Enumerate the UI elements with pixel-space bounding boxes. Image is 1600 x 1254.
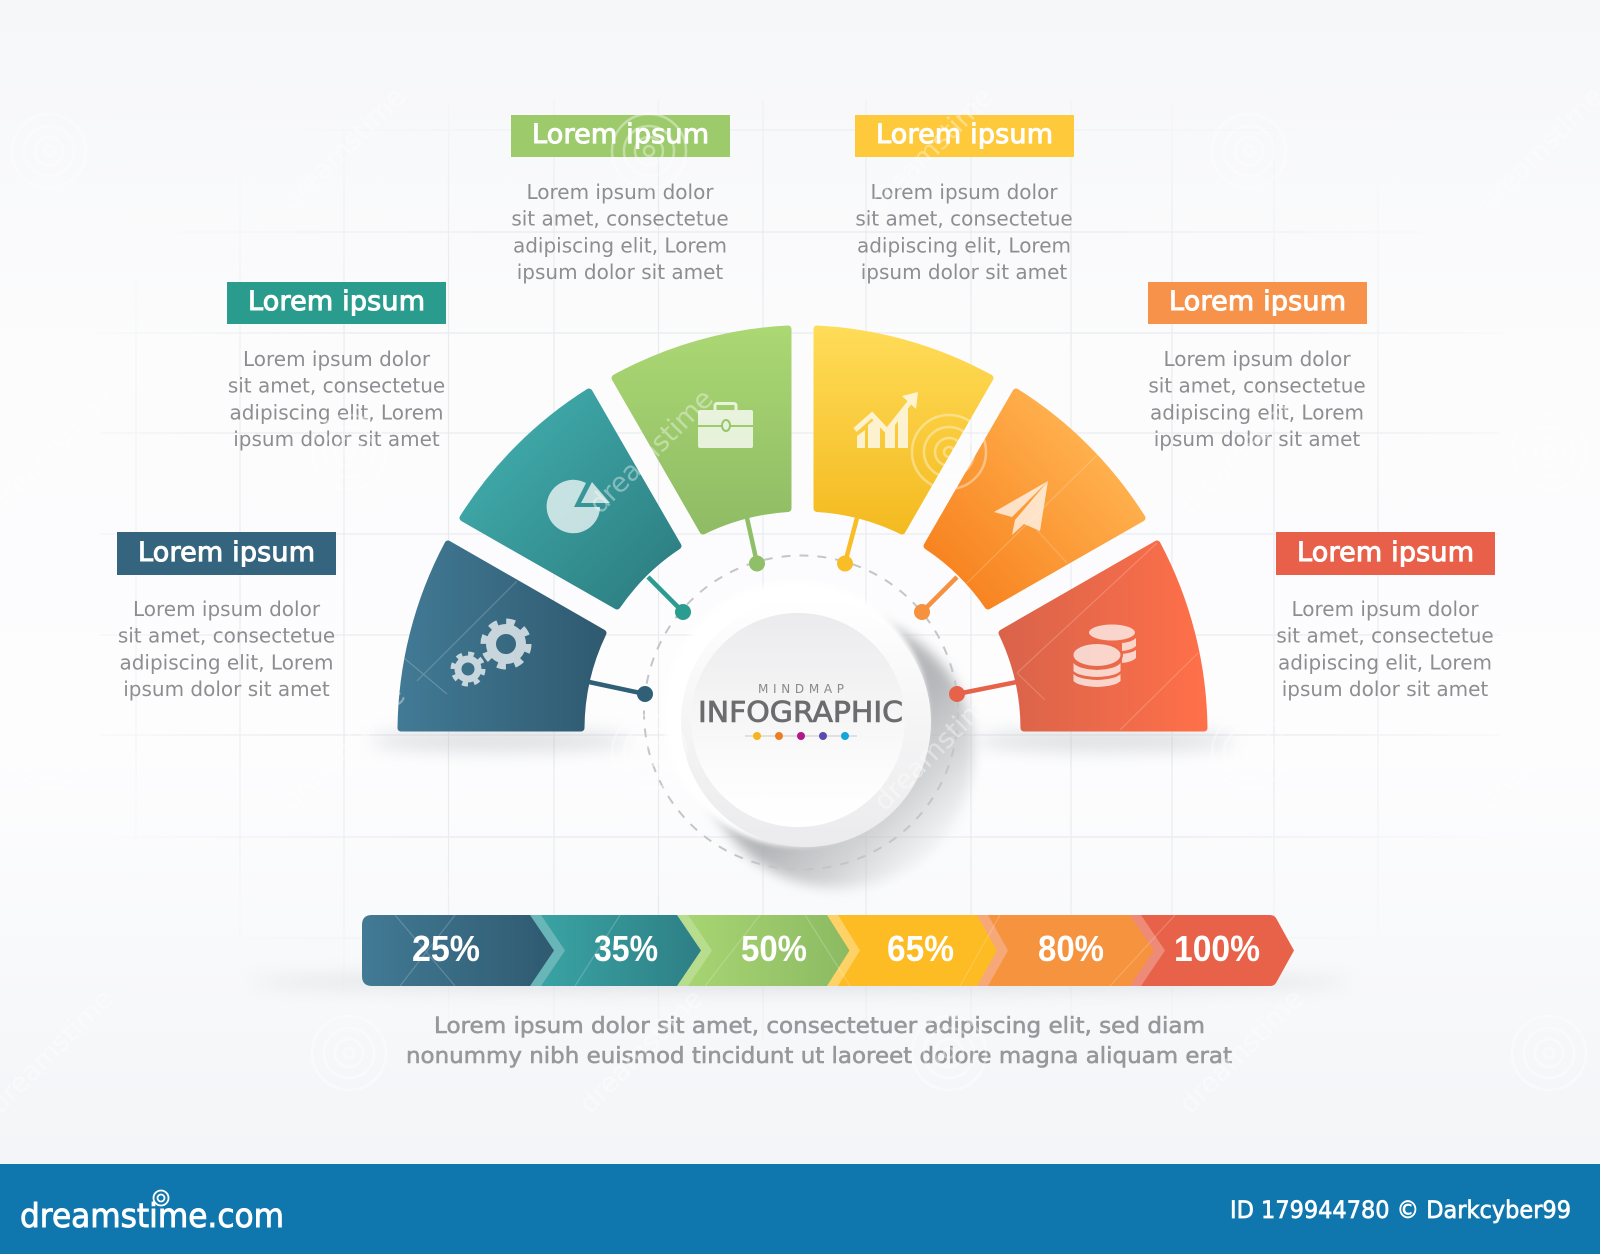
footer credit: ID 179944780 © Darkcyber99 [1230,1196,1571,1224]
label block: 4: Lorem ipsum [876,119,1053,150]
badge caption small: MINDMAP [758,682,844,696]
label block: 1: Lorem ipsum [138,537,315,568]
label block: 5: Lorem ipsum dolor [1163,347,1351,371]
watermark: diagonal site names: dreamstime [868,680,1005,817]
watermark: spiral logos [12,114,1586,1090]
percentages: 100% [1174,928,1260,969]
segment shadows [370,731,1235,751]
label block: 2: Lorem ipsum dolor [243,347,431,371]
label block: 4 [855,115,1074,284]
watermark: diagonal site names: dreamstime [1173,983,1310,1120]
badge dots [745,732,857,740]
label block: 3 [511,115,730,284]
label block: 5 [1148,282,1367,451]
label block: 3: Lorem ipsum dolor [526,180,714,204]
label block: 1: Lorem ipsum dolor [133,597,321,621]
footer bar [0,1164,1600,1254]
icon: pie chart [547,480,610,533]
icon: briefcase [698,404,753,448]
percentages: 65% [887,928,954,969]
dashed orbit ring [644,556,958,870]
label block: 2: sit amet, consectetue [228,374,445,398]
fan segment 1 [401,544,603,728]
label block: 6: adipiscing elit, Lorem [1278,650,1492,674]
icon: gears [453,622,528,684]
watermark: diagonal site names: dreamstime [573,983,710,1120]
watermark: diagonal site names: dreamstime [863,81,1000,218]
label block: 2: adipiscing elit, Lorem [229,400,444,424]
label block: 1 [117,532,336,701]
label block: 2 [227,282,446,451]
fan segment 3 [615,329,788,531]
label block: 5: adipiscing elit, Lorem [1150,400,1364,424]
watermark: diagonal site names: dreamstime [275,81,412,218]
fan segment 4 [817,329,990,531]
center badge [664,582,931,847]
bottom note [406,1013,1232,1069]
icon: paper plane [994,481,1048,535]
icon: growth chart [855,392,918,448]
progress bar [362,915,1294,986]
label block: 1: adipiscing elit, Lorem [119,650,334,674]
label block: 3: ipsum dolor sit amet [517,260,723,284]
percentages: 80% [1038,928,1104,969]
connector lines and dots [589,518,1017,702]
watermark: diagonal site names: dreamstime [583,383,720,520]
label block: 4: ipsum dolor sit amet [861,260,1067,284]
bottom note: nonummy nibh euismod tincidunt ut laoreet dolore magna aliquam erat [406,1043,1232,1069]
bottom note: Lorem ipsum dolor sit amet, consectetuer adipiscing elit, sed diam [434,1013,1205,1039]
label block: 4: sit amet, consectetue [855,207,1073,231]
percentages: 35% [594,928,658,969]
label block: 6: sit amet, consectetue [1276,624,1494,648]
percentages: 25% [412,928,480,969]
watermark: diagonal site names: dreamstime [1173,383,1310,520]
fan segment 5 [927,392,1142,606]
label block: 5: sit amet, consectetue [1148,374,1366,398]
fan segment 6 [1002,544,1204,728]
label block: 5: ipsum dolor sit amet [1154,427,1360,451]
footer logo: dreamstime.com [20,1196,284,1235]
label block: 1: sit amet, consectetue [118,624,335,648]
label block: 2: ipsum dolor sit amet [233,427,440,451]
percentages: 50% [741,928,807,969]
label block: 6: Lorem ipsum [1297,537,1474,568]
label block: 4: adipiscing elit, Lorem [857,233,1071,257]
percentages [412,928,1260,969]
label block: 3: sit amet, consectetue [511,207,729,231]
label block: 3: adipiscing elit, Lorem [513,233,727,257]
label block: 6: Lorem ipsum dolor [1291,597,1479,621]
label block: 2: Lorem ipsum [248,286,425,317]
badge title: INFOGRAPHIC [698,696,903,729]
label block: 1: ipsum dolor sit amet [123,677,330,701]
label block: 3: Lorem ipsum [532,119,709,150]
icon: coins [1071,624,1136,687]
label block: 4: Lorem ipsum dolor [870,180,1058,204]
watermark: lattice lines [395,455,1198,986]
fan segment 2 [463,392,678,606]
label block: 5: Lorem ipsum [1169,286,1346,317]
label block: 6: ipsum dolor sit amet [1282,677,1488,701]
watermark: diagonal site names: dreamstime [275,680,412,817]
label block: 6 [1276,532,1495,701]
progress bar shadow [250,973,1350,991]
center circle shadow [702,616,974,888]
